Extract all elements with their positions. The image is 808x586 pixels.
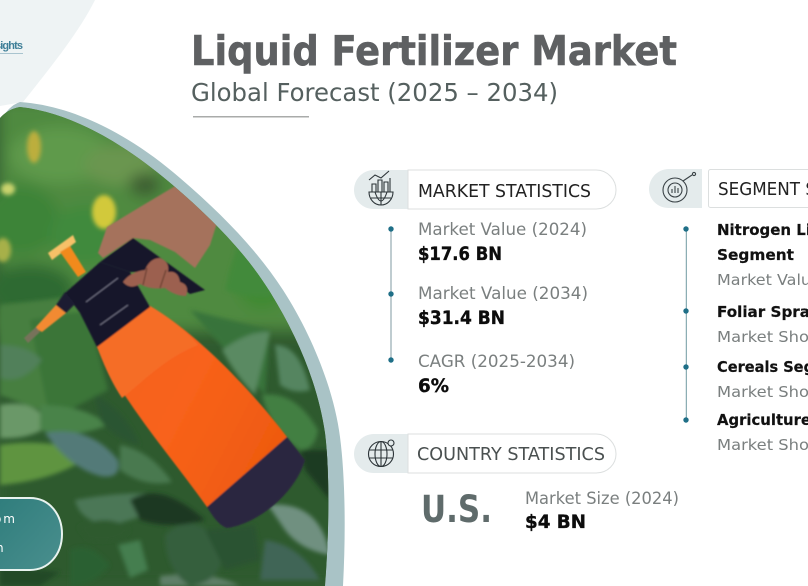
subtitle: Global Forecast (2025 – 2034): [191, 78, 558, 107]
timeline: [388, 226, 394, 363]
stat: market size: Market Size (2024): [525, 489, 679, 508]
stat: market size: $4 BN: [525, 511, 586, 533]
logo panel: [0, 0, 95, 106]
bottle cap: [65, 262, 150, 347]
hand: [98, 185, 217, 268]
heading: segment statistics: [649, 169, 808, 208]
handle: [100, 238, 205, 294]
heading: market statistics: [354, 170, 616, 209]
photo: hand with orange sprayer over green leaves: [0, 100, 345, 586]
segment: nitrogen: Market Valu: [717, 271, 808, 289]
heading: country statistics: COUNTRY STATISTICS: [417, 444, 605, 465]
stat: value 2024: $17.6 BN: [418, 243, 502, 265]
stat: value 2034: $31.4 BN: [418, 307, 505, 329]
title rule: [193, 116, 309, 118]
heading: market statistics: MARKET STATISTICS: [418, 181, 591, 202]
stat: value 2024: [418, 220, 587, 265]
icon: globe with chart: [369, 171, 393, 205]
stat: market size: [525, 489, 679, 533]
stat: CAGR: [418, 352, 575, 397]
segment: agriculture: Market Sho: [717, 436, 808, 454]
decorative circle band: [0, 102, 345, 586]
segment: nitrogen: [717, 221, 808, 289]
bottle base: [207, 437, 305, 528]
stat: value 2034: [418, 284, 588, 329]
panel: country statistics: [354, 434, 679, 533]
yellow blossoms: [0, 131, 116, 262]
stat: CAGR: CAGR (2025-2034): [418, 352, 575, 371]
panel: segment statistics: [649, 169, 808, 454]
fingers: [123, 258, 187, 296]
heading: country statistics: [354, 434, 616, 473]
panel: market statistics: [354, 170, 616, 397]
segment: cereals: [717, 358, 808, 401]
foliage: [0, 235, 330, 586]
title: Liquid Fertilizer Market: [191, 27, 677, 75]
stat: value 2024: Market Value (2024): [418, 220, 587, 239]
segment: nitrogen: Segment: [717, 246, 794, 264]
segment: foliar spray: [717, 303, 808, 346]
stat: CAGR: 6%: [418, 375, 449, 397]
timeline: [683, 226, 689, 423]
icon: globe with pin: [368, 440, 394, 467]
callout pill: [0, 498, 62, 570]
icon: target chart: [663, 172, 696, 202]
stat: value 2034: Market Value (2034): [418, 284, 588, 303]
nozzle: [35, 305, 66, 332]
segment: foliar spray: Foliar Spra: [717, 303, 808, 321]
segment: agriculture: [717, 411, 808, 454]
orange trigger: [48, 235, 76, 260]
segment: foliar spray: Market Sho: [717, 328, 808, 346]
segment: cereals: Market Sho: [717, 383, 808, 401]
sprayer bottle: [24, 185, 305, 528]
country name: U.S.: [421, 488, 492, 531]
